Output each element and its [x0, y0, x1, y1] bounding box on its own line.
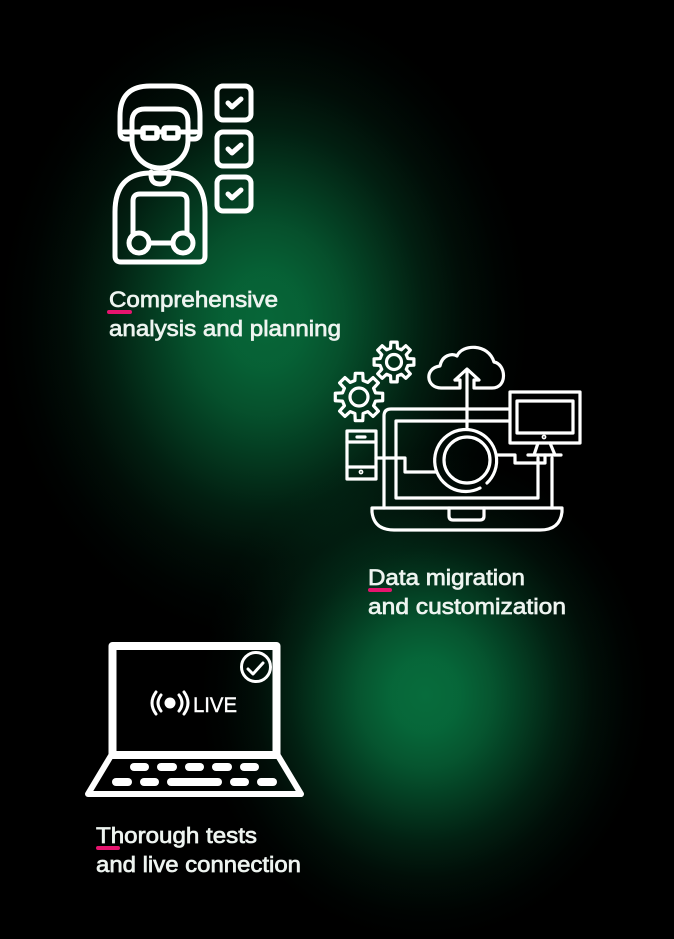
icon: person with laptop and checklist — [115, 86, 251, 262]
heading: thorough tests and live connection — [96, 823, 301, 877]
heading: data migration and customization: Data migration — [368, 565, 525, 590]
icon: laptop showing live status — [88, 646, 301, 794]
heading: data migration and customization — [368, 565, 566, 619]
heading: thorough tests and live connection: and live connection — [96, 852, 301, 877]
step 3: tests and live connection — [88, 646, 301, 877]
icon: laptop connected to cloud and devices — [335, 342, 580, 530]
icon: laptop showing live status: LIVE — [193, 694, 237, 717]
heading: thorough tests and live connection: Thorough tests — [96, 823, 257, 848]
heading: data migration and customization: and customization — [368, 594, 566, 619]
step 2: data migration — [335, 342, 580, 619]
heading: comprehensive analysis and planning — [107, 287, 341, 341]
heading: comprehensive analysis and planning: analysis and planning — [109, 316, 341, 341]
step 1: analysis and planning — [107, 86, 341, 341]
heading: comprehensive analysis and planning: Comprehensive — [109, 287, 278, 312]
